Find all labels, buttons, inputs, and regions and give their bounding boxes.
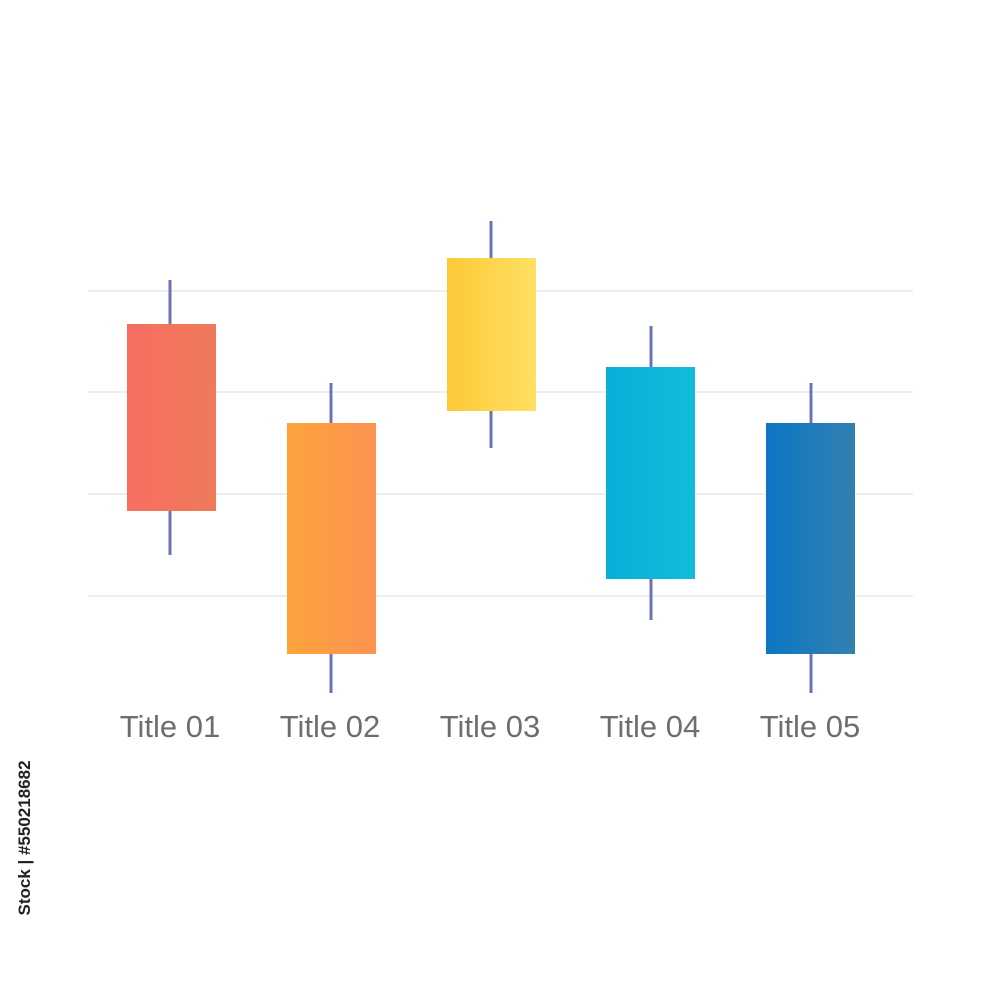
- x-axis labels: [120, 709, 860, 744]
- candle 3: [447, 221, 536, 448]
- x-axis labels: Title 03: [440, 709, 540, 744]
- x-axis labels: Title 02: [280, 709, 380, 744]
- x-axis labels: Title 01: [120, 709, 220, 744]
- x-axis labels: Title 04: [600, 709, 700, 744]
- stock id: Stock | #550218682: [15, 760, 34, 916]
- candle 5: [766, 383, 855, 693]
- candle 2: [287, 383, 376, 693]
- candle 1: [127, 280, 216, 555]
- x-axis labels: Title 05: [760, 709, 860, 744]
- candle 4: [606, 326, 695, 620]
